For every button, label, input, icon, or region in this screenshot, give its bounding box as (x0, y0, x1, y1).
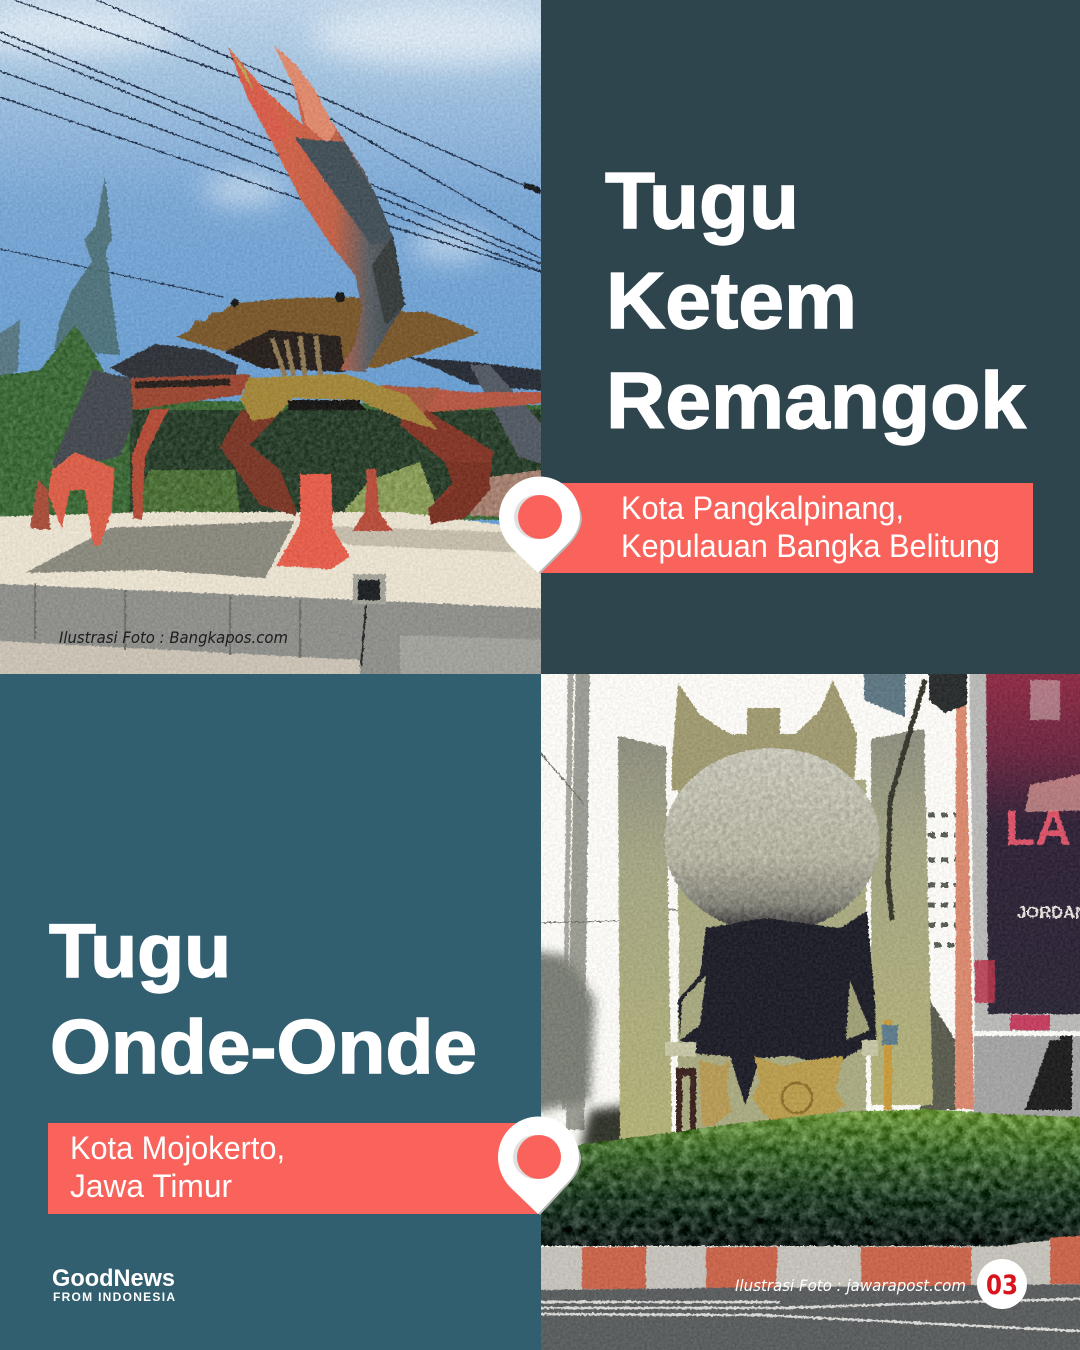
ground (0, 511, 541, 609)
panel: blue-teal title background (0, 674, 541, 1350)
icon: location pin bottom (498, 1116, 581, 1215)
back right legs (408, 356, 541, 391)
heading: Tugu Ketem Remangok: Remangok (606, 356, 1027, 445)
eyes (231, 299, 239, 307)
photo: giant crab monument (0, 0, 570, 700)
kerb (0, 583, 541, 674)
hedge (525, 1109, 1080, 1246)
page number badge: 03 (986, 1270, 1018, 1301)
heading: Tugu Onde-Onde: Tugu (49, 909, 231, 994)
left foliage (541, 944, 620, 1146)
logo: GoodNews from Indonesia: GoodNews (52, 1265, 175, 1292)
left pillar (618, 736, 672, 1144)
gold ornaments (752, 1056, 845, 1128)
big claw (228, 45, 405, 372)
heading: Tugu Ketem Remangok (605, 156, 1027, 445)
right leg (400, 395, 493, 524)
photo: onde-onde monument: LA (1005, 800, 1071, 856)
trees (54, 176, 120, 355)
location banner: Kota Pangkalpinang: Kota Pangkalpinang, (621, 490, 904, 526)
left arm and claw (110, 344, 238, 378)
heading: Tugu Ketem Remangok: Tugu (605, 156, 799, 245)
sphere (664, 748, 880, 932)
carapace (176, 297, 479, 368)
right pillar (871, 730, 933, 1105)
location banner: Kota Pangkalpinang (541, 483, 1033, 573)
location banner: Kota Mojokerto: Jawa Timur (70, 1168, 232, 1204)
location banner: Kota Mojokerto: Kota Mojokerto, (70, 1130, 285, 1166)
page number badge (977, 1259, 1027, 1309)
location banner: Kota Pangkalpinang: Kepulauan Bangka Belitung (621, 528, 1000, 564)
icon: location pin top (499, 476, 582, 574)
billboard (969, 650, 1080, 1031)
underside (379, 385, 440, 414)
heading: Tugu Onde-Onde (49, 909, 477, 1090)
centre leg (220, 410, 296, 516)
photo credit: onde-onde: Ilustrasi Foto : jawarapost.com (735, 1276, 966, 1295)
box (353, 574, 386, 604)
photo credit: crab: Ilustrasi Foto : Bangkapos.com (59, 628, 288, 647)
back panel (678, 780, 866, 1130)
bushes (0, 325, 560, 520)
roof (672, 680, 857, 790)
panel: dark teal title background (541, 0, 1080, 674)
cones (276, 474, 350, 569)
red pole (955, 700, 974, 1109)
photo: onde-onde monument (520, 650, 1080, 1350)
road (525, 1284, 1080, 1350)
heading: Tugu Ketem Remangok: Ketem (606, 256, 857, 345)
wires (541, 752, 678, 924)
heading: Tugu Onde-Onde: Onde-Onde (50, 1005, 477, 1090)
base body (678, 911, 876, 1105)
foliage right (928, 815, 956, 945)
logo: GoodNews from Indonesia: FROM INDONESIA (53, 1290, 175, 1304)
wall behind (974, 1036, 1080, 1125)
poles (566, 650, 590, 1130)
traffic lights (864, 674, 906, 718)
kerb (541, 1240, 1080, 1291)
left thin leg (132, 408, 169, 520)
logo: GoodNews from Indonesia (52, 1265, 175, 1304)
location banner: Kota Mojokerto (48, 1123, 541, 1214)
